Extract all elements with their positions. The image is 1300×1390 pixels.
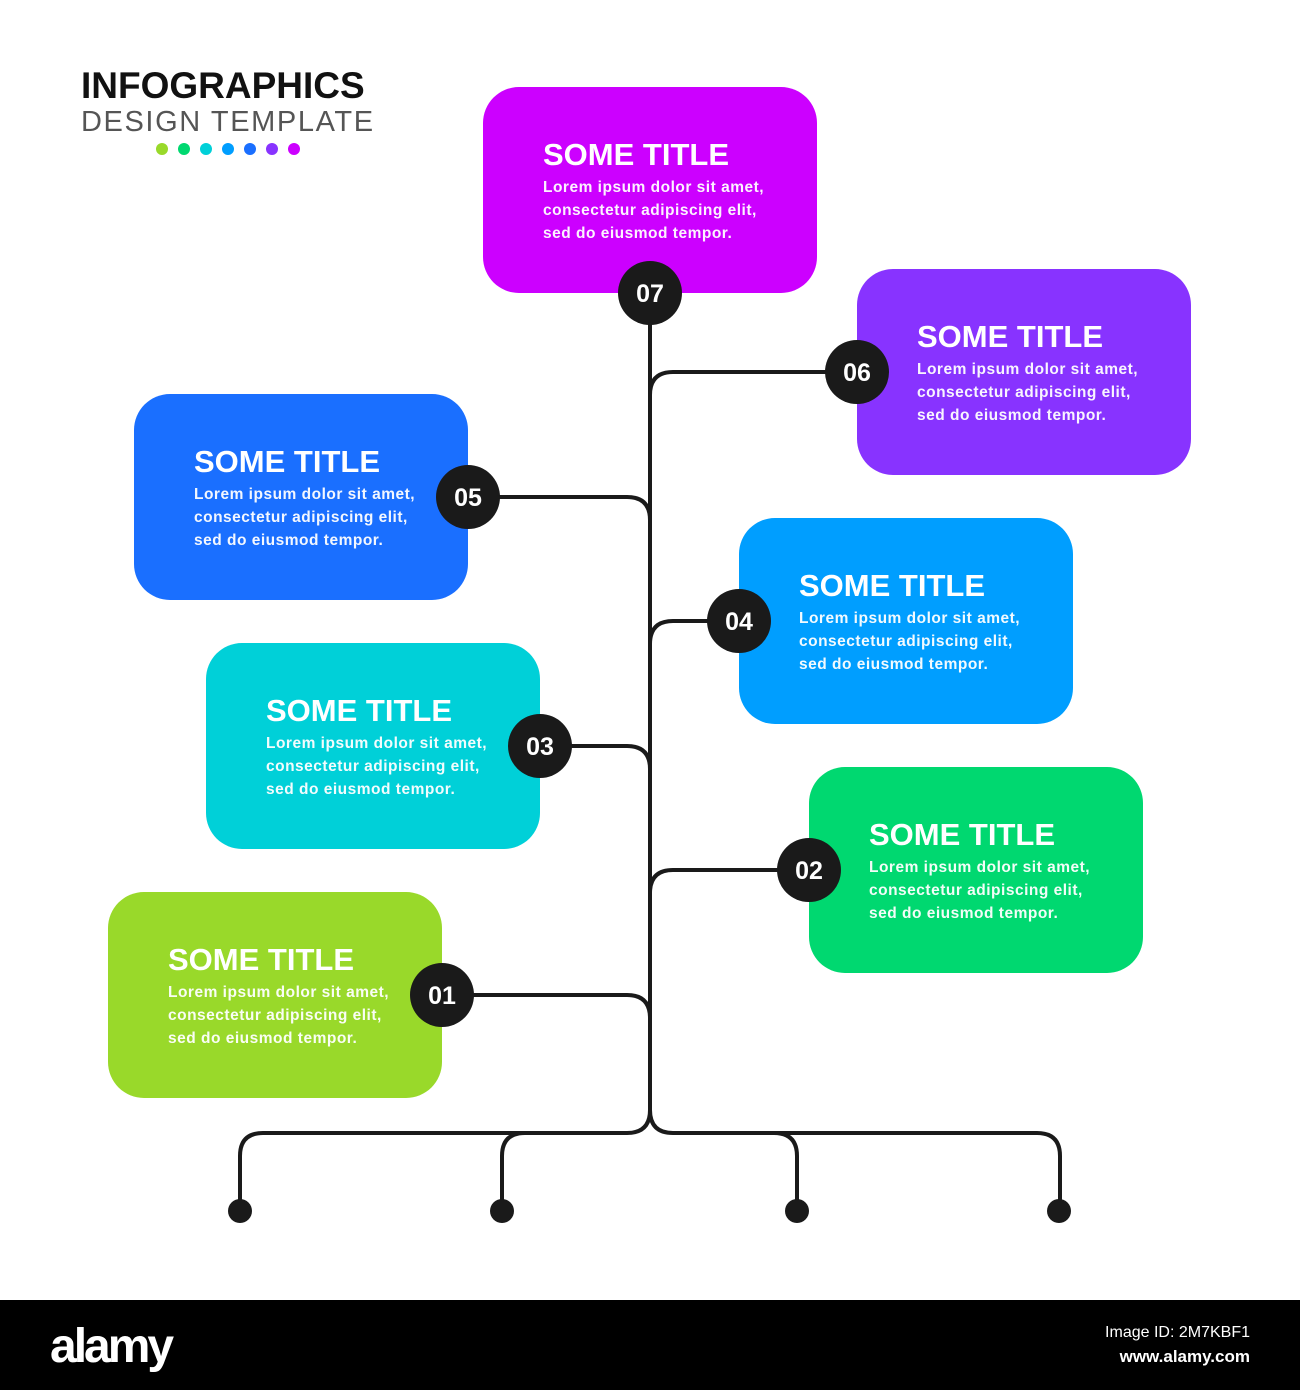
panel 02: consectetur adipiscing elit, [869, 882, 1083, 899]
connector lines [240, 293, 1060, 1211]
panel 05: Lorem ipsum dolor sit amet, [194, 486, 415, 503]
panel 07 [483, 87, 817, 293]
number badges: 04 [725, 608, 753, 636]
number badges: 03 [526, 733, 554, 761]
panel 01 [108, 892, 442, 1098]
panel 03: SOME TITLE [266, 693, 452, 728]
panel 02: sed do eiusmod tempor. [869, 905, 1058, 922]
panel 03: consectetur adipiscing elit, [266, 758, 480, 775]
panel 02: Lorem ipsum dolor sit amet, [869, 859, 1090, 876]
number badges: 01 [428, 982, 456, 1010]
bottom dots [228, 1199, 1071, 1223]
number badges: 05 [454, 484, 482, 512]
number badges: 06 [843, 359, 871, 387]
panel 06: sed do eiusmod tempor. [917, 407, 1106, 424]
panel 05: sed do eiusmod tempor. [194, 532, 383, 549]
panel 05: SOME TITLE [194, 444, 380, 479]
panel 02: SOME TITLE [869, 817, 1055, 852]
number badges: 02 [795, 857, 823, 885]
header [81, 65, 375, 155]
panel 06: Lorem ipsum dolor sit amet, [917, 361, 1138, 378]
panel 07: sed do eiusmod tempor. [543, 225, 732, 242]
panel 04: SOME TITLE [799, 568, 985, 603]
panel 06: consectetur adipiscing elit, [917, 384, 1131, 401]
panel 04 [739, 518, 1073, 724]
panel 07: SOME TITLE [543, 137, 729, 172]
footer bar: alamy [50, 1320, 174, 1373]
header: INFOGRAPHICS [81, 65, 365, 106]
panel 04: consectetur adipiscing elit, [799, 633, 1013, 650]
panel 05: consectetur adipiscing elit, [194, 509, 408, 526]
panel 06: SOME TITLE [917, 319, 1103, 354]
panel 04: Lorem ipsum dolor sit amet, [799, 610, 1020, 627]
panel 06 [857, 269, 1191, 475]
panel 03: sed do eiusmod tempor. [266, 781, 455, 798]
panel 03 [206, 643, 540, 849]
panel 03: Lorem ipsum dolor sit amet, [266, 735, 487, 752]
panel 01: SOME TITLE [168, 942, 354, 977]
panel 04: sed do eiusmod tempor. [799, 656, 988, 673]
color dots [156, 143, 300, 155]
number badges: 07 [636, 280, 664, 308]
panel 02 [809, 767, 1143, 973]
panel 07: consectetur adipiscing elit, [543, 202, 757, 219]
footer bar: www.alamy.com [1119, 1347, 1250, 1366]
footer bar [0, 1300, 1300, 1390]
number badges [410, 261, 889, 1027]
panel 05 [134, 394, 468, 600]
panel 01: sed do eiusmod tempor. [168, 1030, 357, 1047]
footer bar: Image ID: 2M7KBF1 [1105, 1324, 1250, 1341]
header: DESIGN TEMPLATE [81, 106, 375, 138]
panel 07: Lorem ipsum dolor sit amet, [543, 179, 764, 196]
panel 01: consectetur adipiscing elit, [168, 1007, 382, 1024]
panel 01: Lorem ipsum dolor sit amet, [168, 984, 389, 1001]
